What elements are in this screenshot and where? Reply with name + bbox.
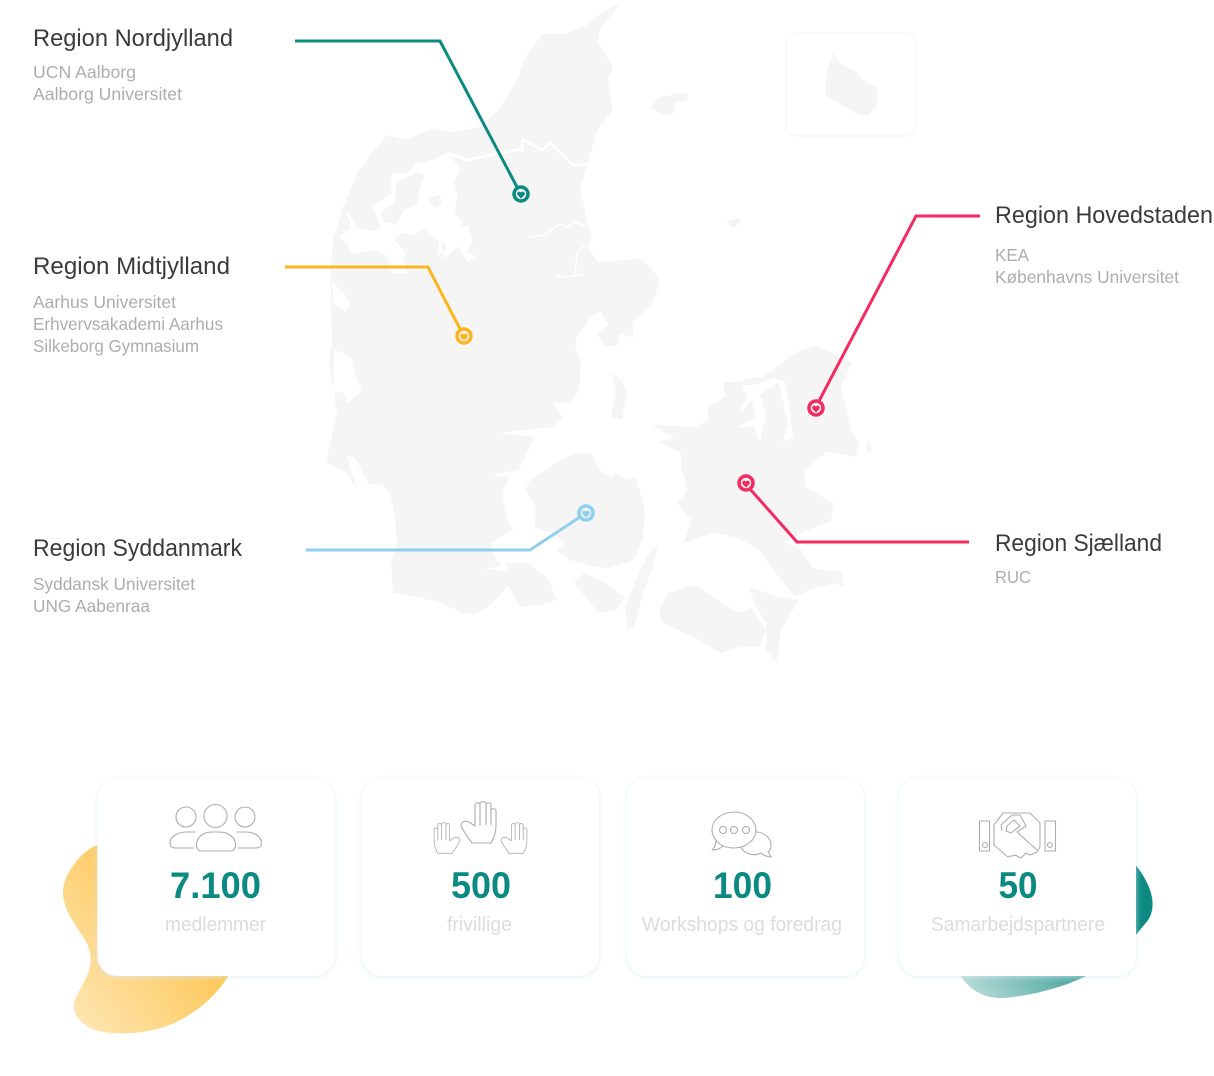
label: Workshops og foredrag: Workshops og foredrag: [642, 914, 842, 936]
text block: Region Sjaelland: RUC: [995, 567, 1031, 587]
icon: raised hands: [434, 802, 527, 853]
stat card: samarbejdspartnere: [899, 778, 1136, 976]
map: Fyn: [525, 453, 645, 568]
text block: Region Syddanmark: UNG Aabenraa: [33, 596, 150, 616]
text block: Region Hovedstaden: Københavns Universitet: [995, 267, 1179, 287]
decorative blob: teal: [960, 850, 1153, 998]
marker: Midtjylland: [457, 329, 471, 343]
marker: Syddanmark: [579, 506, 593, 520]
text block: Region Midtjylland: Region Midtjylland: [33, 253, 230, 280]
text block: Region Hovedstaden: Region Hovedstaden: [995, 202, 1213, 229]
map: Jutland: [326, 1, 660, 615]
text block: Region Midtjylland: Silkeborg Gymnasium: [33, 336, 199, 356]
text block: Region Sjaelland: [995, 530, 1162, 587]
connector: Hovedstaden: [809, 216, 980, 415]
decorative blob: yellow: [63, 840, 240, 1033]
map of Denmark: [326, 1, 872, 663]
map: Zealand: [652, 345, 859, 597]
map: Samsoe: [611, 373, 627, 420]
number: 50: 50: [998, 865, 1038, 906]
text block: Region Syddanmark: Region Syddanmark: [33, 535, 243, 562]
stat card: workshops: [627, 778, 864, 976]
map: Taasinge and Aeroe: [574, 573, 624, 613]
icon: speech bubbles: [712, 812, 771, 857]
text block: Region Midtjylland: [33, 253, 230, 356]
label: frivillige: frivillige: [447, 914, 512, 936]
label: medlemmer: medlemmer: [165, 914, 266, 936]
icon: people: [170, 804, 262, 851]
text block: Region Syddanmark: Syddansk Universitet: [33, 574, 195, 594]
text block: Region Nordjylland: UCN Aalborg: [33, 62, 136, 82]
connector: Sjaelland: [739, 476, 969, 542]
inset: Bornholm: [786, 33, 916, 136]
connector: Nordjylland: [295, 41, 528, 201]
stat card: frivillige: [362, 778, 599, 976]
marker: Nordjylland: [514, 187, 528, 201]
text block: Region Hovedstaden: [995, 202, 1213, 287]
text block: Region Nordjylland: Aalborg Universitet: [33, 84, 182, 104]
text block: Region Midtjylland: Aarhus Universitet: [33, 292, 176, 312]
map: Laesoe: [650, 92, 688, 115]
map: Anholt: [726, 218, 741, 228]
map: Amager: [866, 441, 872, 453]
connector: Midtjylland: [285, 267, 471, 343]
text block: Region Sjaelland: Region Sjælland: [995, 530, 1162, 557]
marker: Hovedstaden: [809, 401, 823, 415]
icon: handshake: [980, 813, 1056, 858]
text block: Region Midtjylland: Erhvervsakademi Aarhus: [33, 314, 223, 334]
connector: Syddanmark: [306, 506, 593, 550]
text block: Region Nordjylland: [33, 25, 233, 104]
map: Lolland and Falster: [659, 585, 766, 653]
label: Samarbejdspartnere: Samarbejdspartnere: [931, 914, 1105, 936]
map: Langeland: [625, 543, 658, 630]
number: 100: 100: [713, 865, 772, 906]
stat card: medlemmer: [98, 778, 334, 976]
map: Limfjord and inland waters: [333, 140, 590, 563]
map: Isefjord and Roskilde fjord: [735, 378, 793, 443]
text block: Region Syddanmark: [33, 535, 243, 616]
text block: Region Hovedstaden: KEA: [995, 245, 1029, 265]
text block: Region Nordjylland: Region Nordjylland: [33, 25, 233, 52]
number: 500: 500: [451, 865, 511, 906]
number: 7.100: 7.100: [170, 865, 261, 906]
marker: Sjaelland: [739, 476, 753, 490]
